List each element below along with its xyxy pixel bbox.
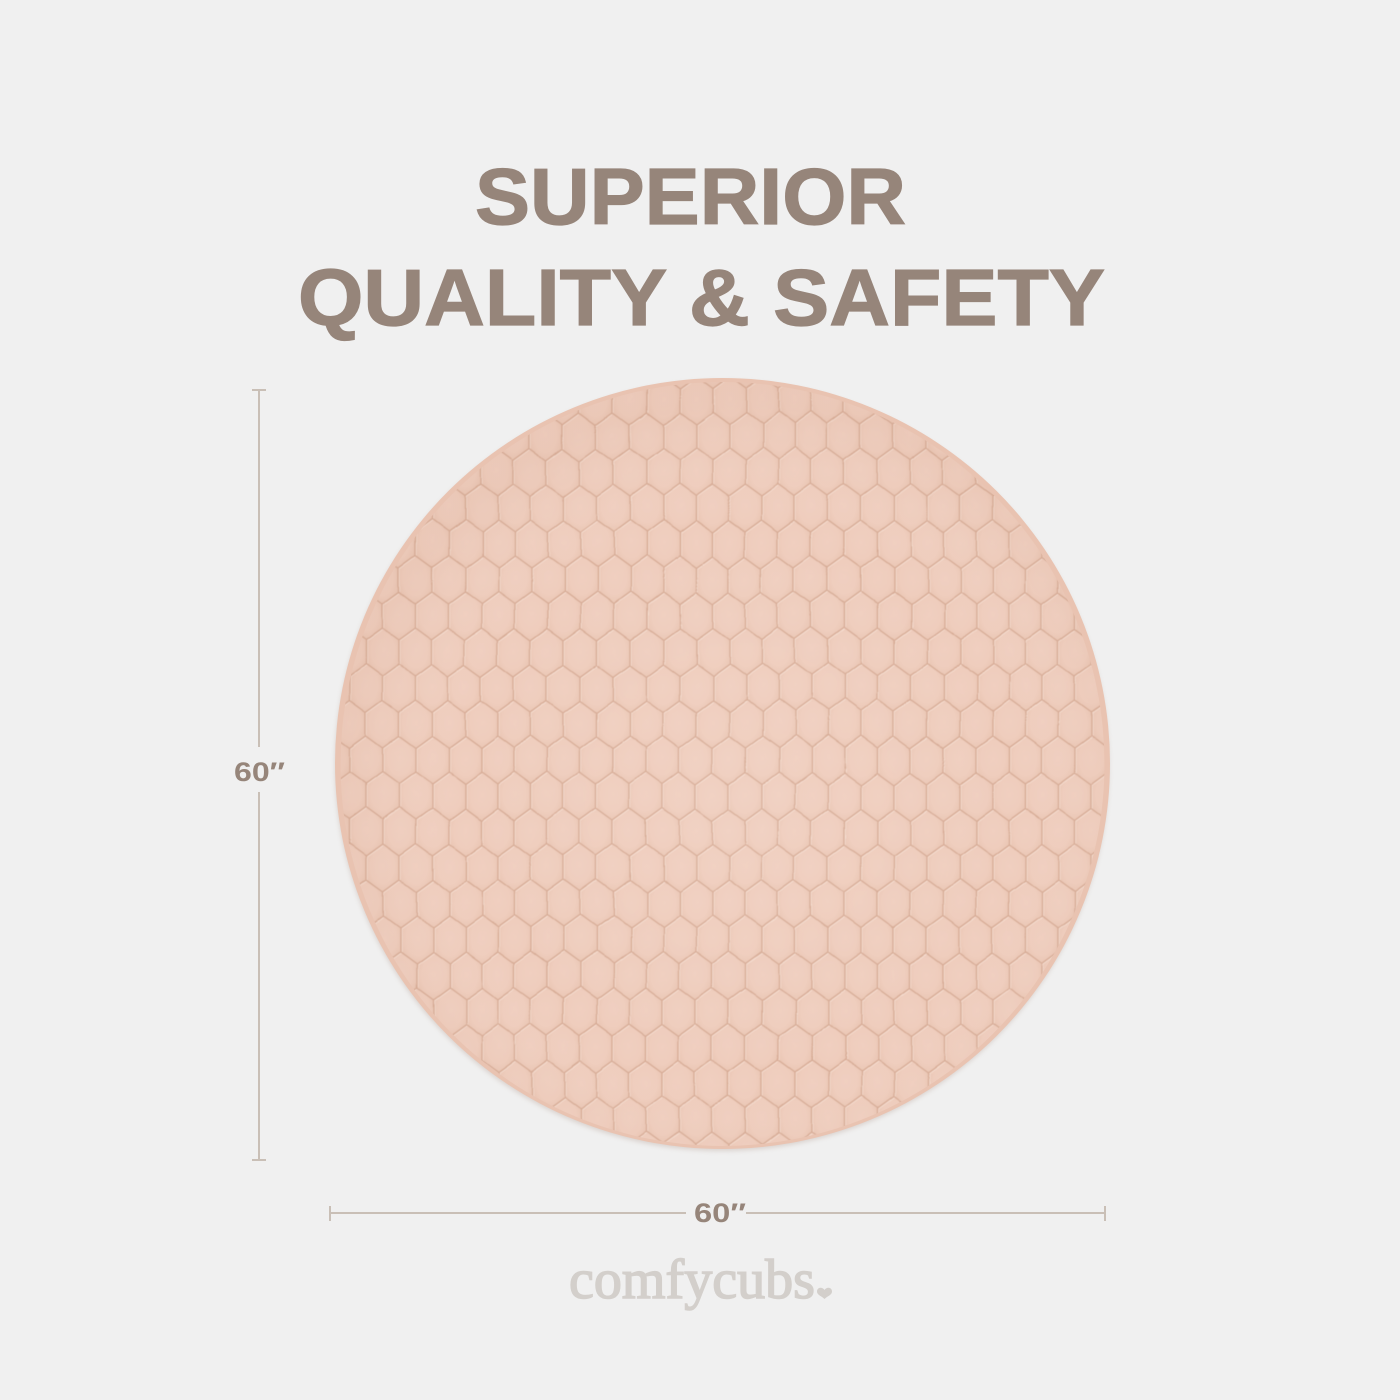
vertical dimension: 60 inches: 60″ [234, 757, 285, 787]
horizontal dimension: 60 inches: 60″ [694, 1198, 746, 1228]
brand logo: comfycubs [569, 1249, 815, 1311]
title: QUALITY & SAFETY [298, 253, 1105, 342]
quilted honeycomb surface [340, 382, 1104, 1146]
vertical dimension: 60 inches [234, 390, 285, 1160]
round quilted play mat [320, 360, 1130, 1170]
mat rim [335, 378, 1110, 1149]
horizontal dimension: 60 inches [330, 1198, 1105, 1228]
logo heart [817, 1288, 832, 1299]
title [298, 152, 1105, 342]
title: SUPERIOR [475, 152, 906, 241]
mat shadow [335, 381, 1109, 1151]
